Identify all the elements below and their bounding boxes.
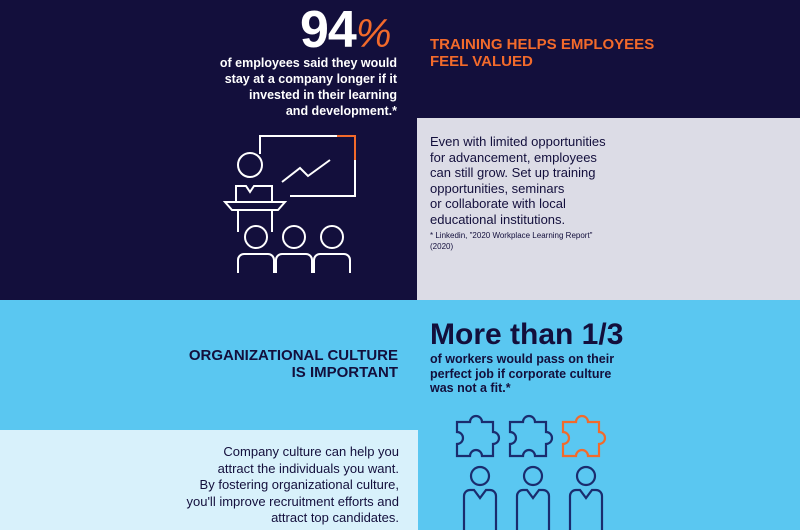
stat: more than 1/3: More than 1/3 — [430, 318, 623, 351]
heading: training — [430, 36, 654, 70]
body text: or collaborate with local — [430, 196, 566, 211]
panel: gray text box — [417, 118, 800, 300]
stat text: was not a fit.* — [430, 381, 511, 395]
heading: culture: IS IMPORTANT — [292, 364, 398, 381]
panel: light blue text box — [0, 430, 418, 530]
body text: for advancement, employees — [430, 150, 597, 164]
footnote: (2020) — [430, 242, 453, 251]
body text: can still grow. Set up training — [430, 165, 595, 180]
stat text: of employees said they would — [220, 56, 397, 70]
body text: By fostering organizational culture, — [200, 477, 399, 492]
heading: culture: ORGANIZATIONAL CULTURE — [189, 347, 398, 364]
stat text: stay at a company longer if it — [225, 72, 397, 86]
body text — [430, 134, 606, 226]
heading: training: FEEL VALUED — [430, 53, 533, 70]
body text: Company culture can help you — [223, 444, 399, 459]
body text: Even with limited opportunities — [430, 134, 606, 149]
stat text: perfect job if corporate culture — [430, 366, 611, 380]
stat text: and development.* — [286, 104, 397, 118]
stat text: invested in their learning — [249, 88, 397, 102]
stat text — [430, 352, 614, 395]
footnote — [430, 231, 593, 251]
stat text: of workers would pass on their — [430, 352, 614, 366]
icon: puzzles and people — [456, 414, 606, 530]
big stat 94%: 94% — [300, 1, 390, 59]
panel: bottom blue — [0, 300, 800, 530]
body text: you'll improve recruitment efforts and — [186, 494, 399, 508]
icon: presenter — [222, 135, 356, 273]
heading: culture — [189, 347, 398, 381]
heading: training: TRAINING HELPS EMPLOYEES — [430, 36, 654, 53]
body text: attract top candidates. — [271, 510, 399, 525]
body text: attract the individuals you want. — [218, 460, 399, 476]
body text — [186, 444, 399, 525]
panel: top dark — [0, 0, 800, 300]
stat text — [220, 56, 397, 118]
footnote: * Linkedin, "2020 Workplace Learning Report" — [430, 231, 593, 240]
body text: opportunities, seminars — [430, 180, 564, 196]
body text: educational institutions. — [430, 212, 565, 226]
